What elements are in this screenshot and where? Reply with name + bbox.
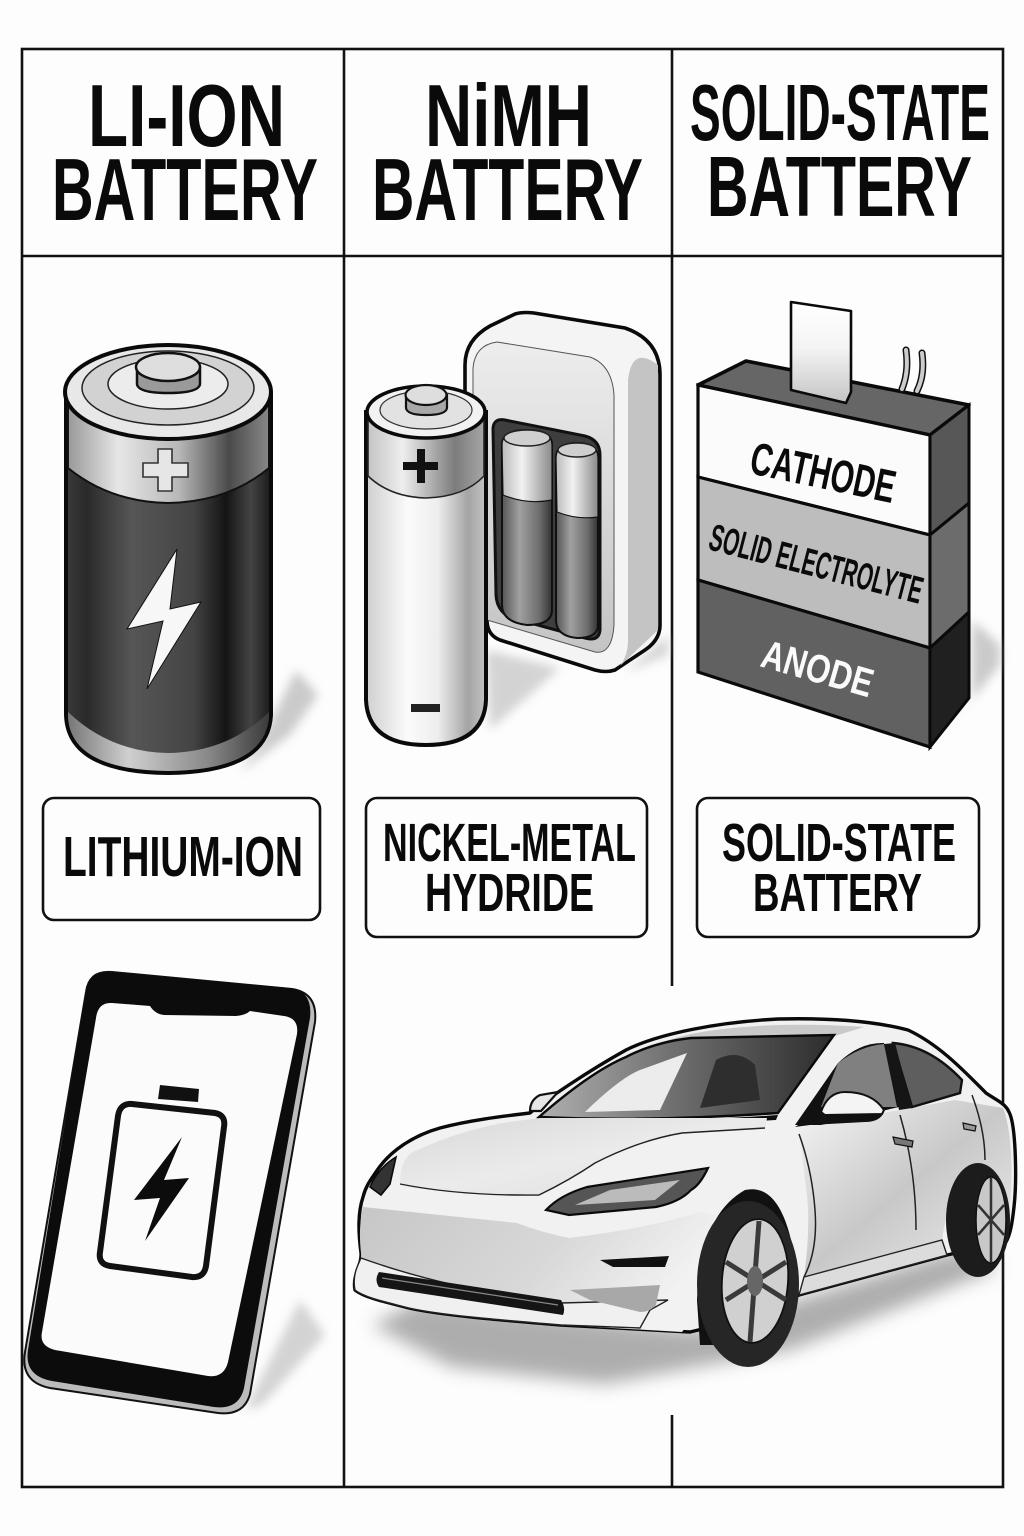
bumper: [354, 1207, 715, 1332]
shadow: [486, 650, 560, 730]
body: [354, 1019, 1016, 1332]
cathode layer: [698, 385, 930, 535]
screen: [42, 1003, 297, 1376]
icon: solid-state layered block: [698, 302, 1000, 747]
plus symbol: [143, 449, 188, 491]
right headlight: [546, 1168, 708, 1215]
heading: solid-state battery: [690, 68, 990, 235]
heading: Li-ion battery: [52, 66, 318, 239]
AA cell: [366, 385, 486, 745]
minus symbol: [411, 704, 440, 712]
sill: [799, 1240, 947, 1295]
heading: NiMH battery: BATTERY: [372, 140, 643, 239]
icon: smartphone with battery symbol: [24, 972, 325, 1413]
lightning bolt: [127, 549, 201, 689]
front wheel: [697, 1201, 799, 1367]
heading: Li-ion battery: BATTERY: [52, 140, 318, 239]
far mirror: [530, 1092, 558, 1111]
icon: NiMH battery and charger: [366, 312, 668, 745]
icon: electric car: [354, 1019, 1016, 1384]
label box: solid-state battery: BATTERY: [753, 863, 922, 923]
windshield: [536, 1035, 834, 1124]
anode layer: [698, 580, 930, 747]
icon: lithium-ion cylinder battery: [65, 345, 318, 773]
tab: [791, 302, 851, 403]
front wheel arch: [697, 1189, 799, 1345]
fog slit: [600, 1256, 669, 1267]
charger: [465, 312, 660, 672]
label box: lithium-ion: LITHIUM-ION: [63, 825, 303, 889]
block right side: [930, 405, 969, 535]
label box: nickel-metal hydride: [366, 798, 647, 937]
block top: [698, 361, 969, 435]
side doors: [799, 1100, 1012, 1277]
ground shadow: [372, 1250, 1000, 1384]
label box: lithium-ion: [43, 798, 320, 920]
electrolyte layer: [698, 477, 930, 648]
hood: [400, 1118, 767, 1195]
label: anode: ANODE: [757, 632, 878, 706]
wires: [902, 350, 923, 391]
label box: solid-state battery: [697, 798, 979, 937]
label: cathode: CATHODE: [746, 432, 900, 513]
roof shade: [545, 1025, 864, 1112]
plus symbol: [403, 449, 438, 483]
wing mirror: [795, 1092, 884, 1127]
label box: nickel-metal hydride: NICKEL-METAL: [383, 813, 636, 873]
ground shadow: [240, 670, 318, 772]
door handles: [893, 1137, 913, 1147]
heading: NiMH battery: [372, 66, 643, 239]
lower air intake: [376, 1272, 564, 1315]
battery symbol: [100, 1085, 224, 1277]
heading: Li-ion battery: LI-ION: [88, 66, 285, 165]
heading: NiMH battery: NiMH: [425, 66, 592, 165]
label box: nickel-metal hydride: HYDRIDE: [425, 863, 594, 923]
phone shadow: [245, 1300, 325, 1410]
rear wheel: [946, 1163, 1010, 1277]
shadow: [935, 620, 1000, 745]
side windows: [795, 1043, 962, 1125]
left headlight: [370, 1157, 396, 1195]
